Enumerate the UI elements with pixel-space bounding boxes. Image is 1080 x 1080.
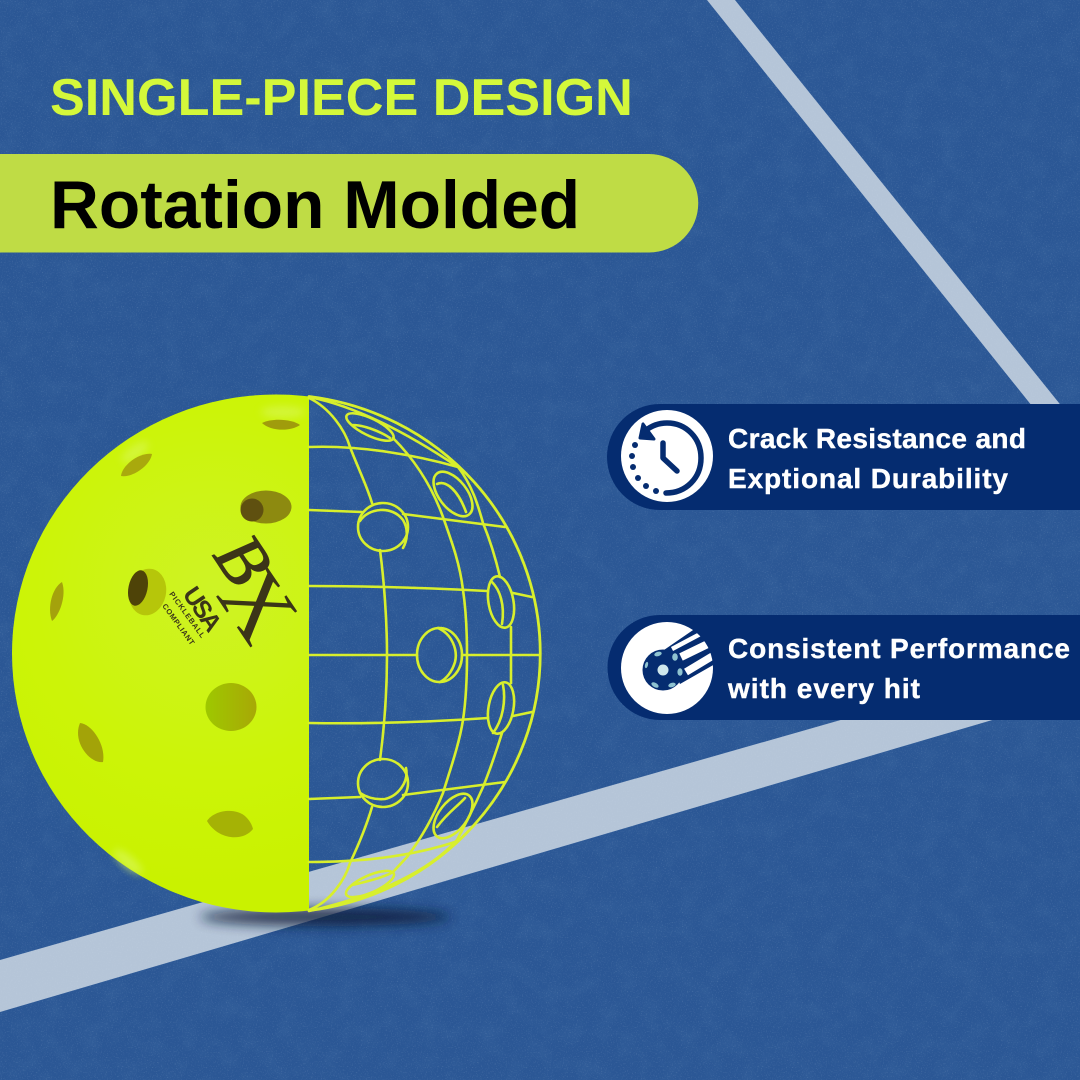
- banner: rotation molded: Rotation Molded: [50, 168, 580, 243]
- solid half of pickleball: [12, 394, 309, 912]
- callout: consistent performance: with every hit: [727, 673, 920, 704]
- ball logo: PICKLEBALL: [167, 590, 207, 640]
- callout: crack resistance: [607, 404, 1080, 510]
- ball logo: X: [198, 551, 317, 660]
- callout text: Consistent Performance: [728, 633, 1070, 664]
- ball logo: COMPLIANT: [160, 602, 197, 647]
- heading: single-piece design: SINGLE-PIECE DESIGN: [50, 69, 633, 127]
- ball shadow: [200, 908, 450, 926]
- banner: rotation molded: [0, 154, 698, 252]
- callout: consistent performance: [608, 615, 1080, 720]
- ball logo: B: [199, 521, 286, 600]
- icon: clock with reverse arrow: [621, 410, 713, 502]
- wireframe outline: [309, 396, 540, 910]
- callout: crack resistance: Exptional Durability: [728, 463, 1008, 494]
- ball logo: [163, 534, 298, 648]
- icon: ball in motion: [621, 622, 722, 714]
- court line: upper right: [707, 0, 1080, 481]
- wireframe meridians: [309, 398, 372, 503]
- ball holes: [50, 420, 300, 837]
- ball logo: USA: [177, 582, 227, 637]
- wireframe parallels: [309, 447, 458, 467]
- wireframe half of pickleball: [309, 396, 540, 911]
- court line: lower diagonal: [0, 618, 1080, 1012]
- callout text: Crack Resistance and: [728, 423, 1026, 454]
- wireframe holes: [343, 408, 397, 446]
